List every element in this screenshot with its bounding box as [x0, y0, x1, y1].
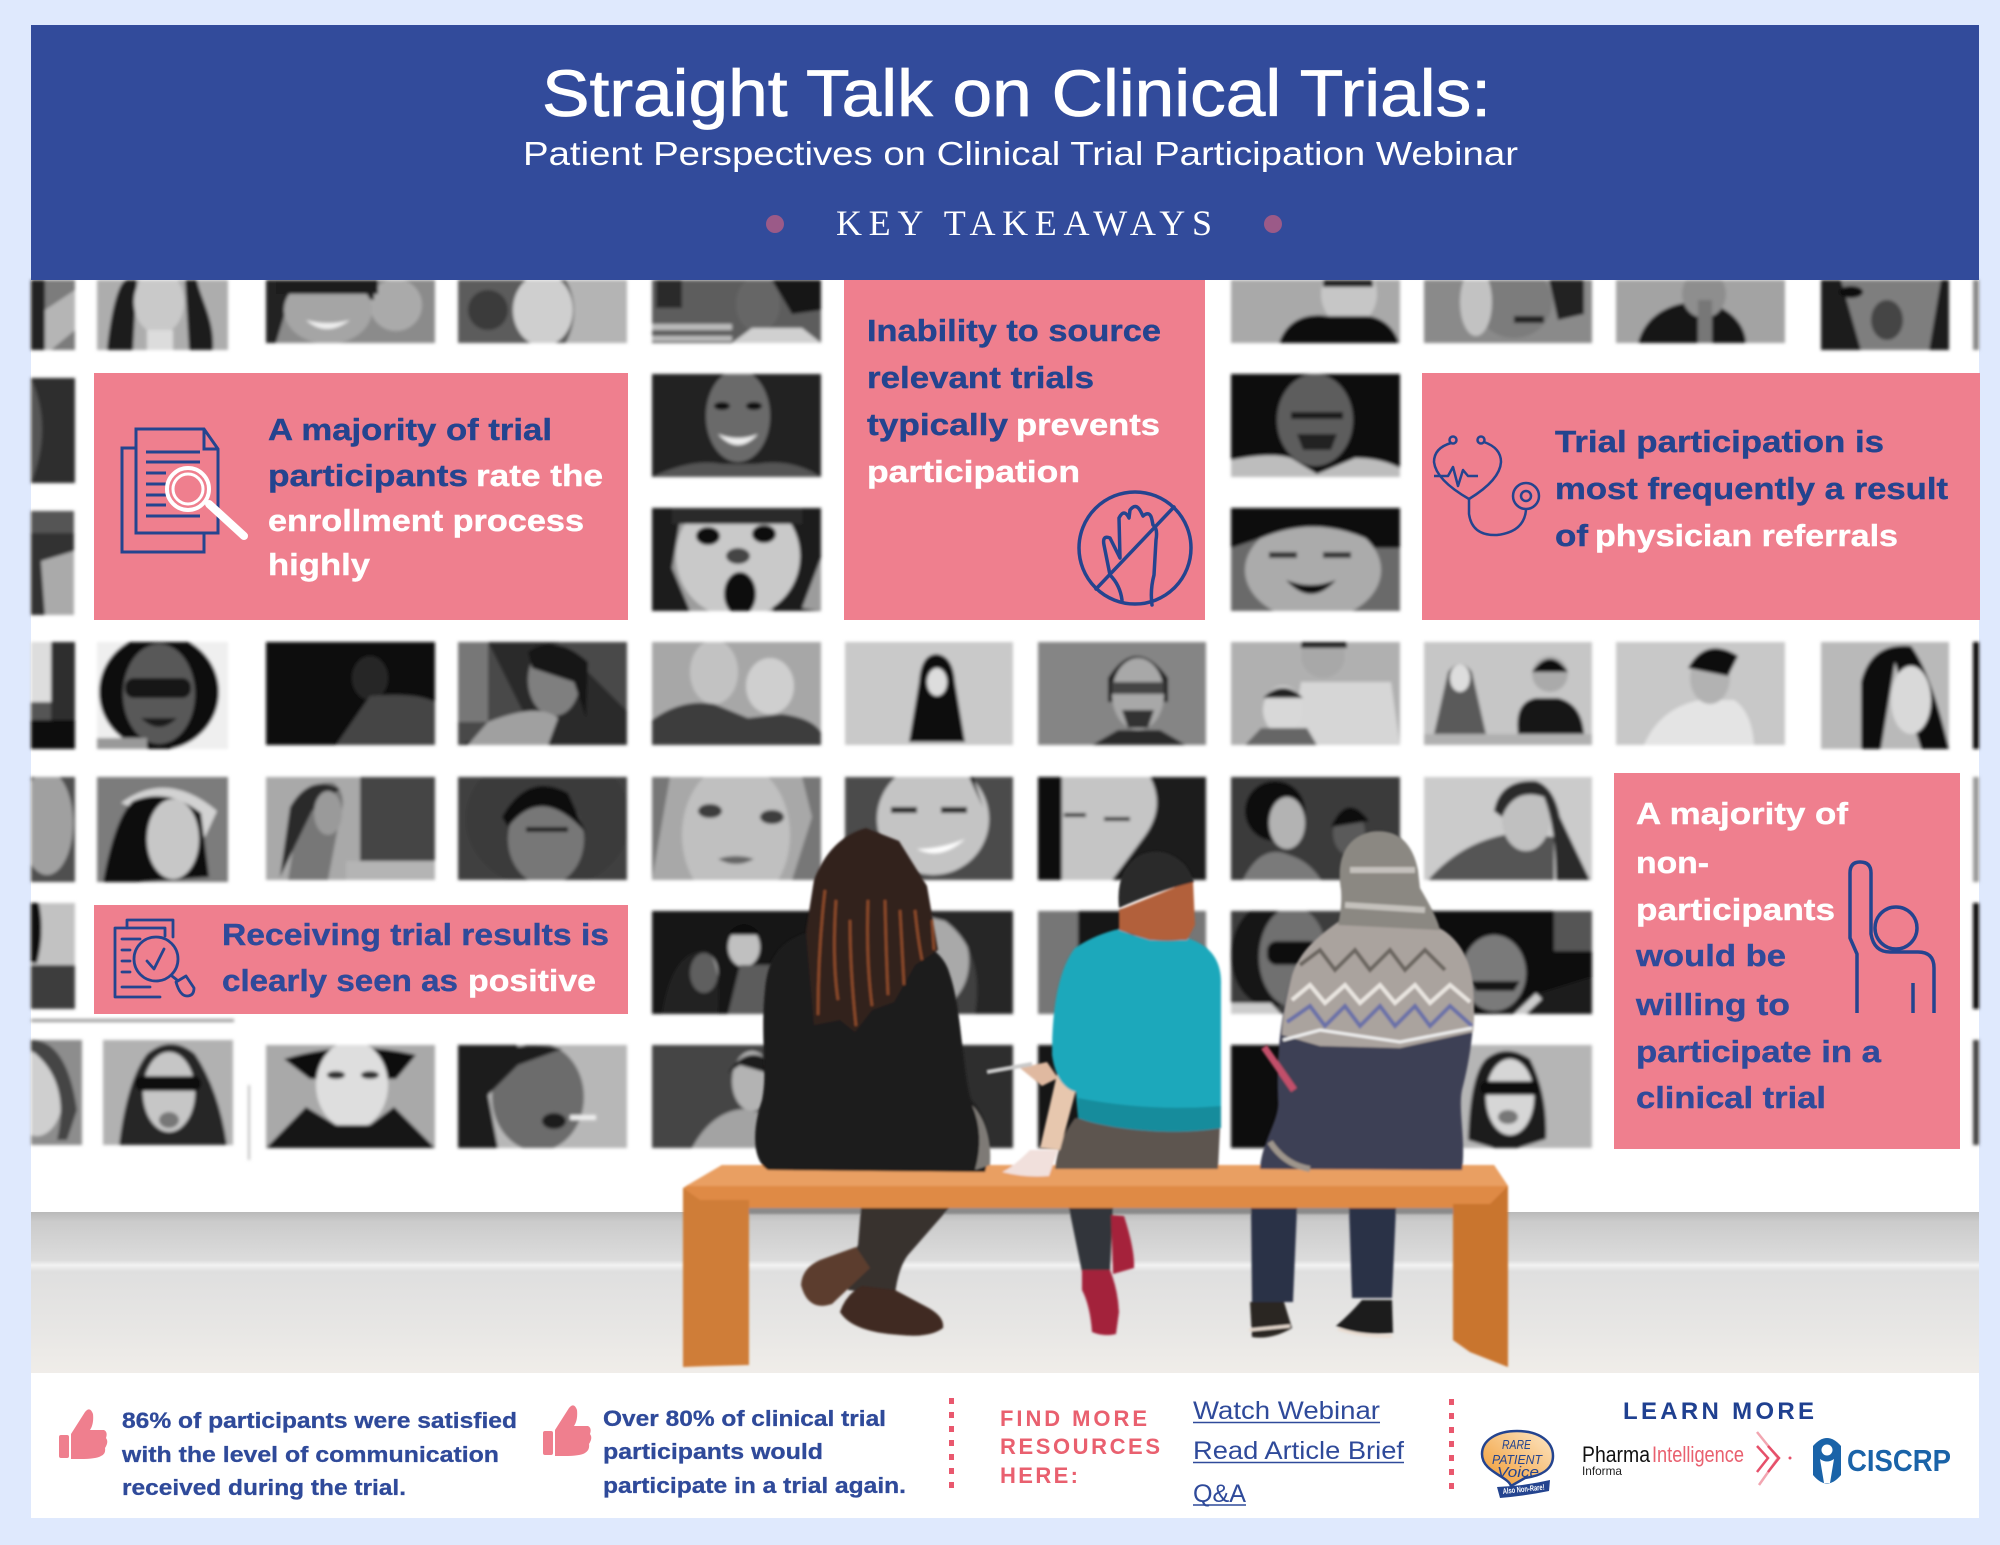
photo: obscured portrait — [1036, 908, 1208, 1016]
text: enrollment rated highly: participants — [268, 458, 468, 493]
text: trial results positive: Receiving trial results is — [222, 917, 609, 952]
photo: woman standing on light background — [844, 640, 1014, 746]
photo: man smoking — [458, 1043, 627, 1151]
people on bench — [683, 828, 1508, 1367]
header banner — [31, 25, 1979, 280]
photo: row 1 smiling man — [263, 280, 438, 346]
photo: dark portrait hidden by teal sweater — [1038, 1045, 1206, 1148]
photo: row 7 edge blonde — [11, 1040, 82, 1145]
icon: thumbs up — [59, 1409, 107, 1459]
logo: Pharma Intelligence: Intelligence — [1652, 1442, 1744, 1467]
bench shadow strip — [749, 1206, 1453, 1214]
photo: man with sunglasses — [1228, 908, 1342, 1016]
photo: laughing man — [1228, 505, 1403, 614]
find more resources heading: FIND MORE — [1000, 1406, 1147, 1431]
photo: row 1 edge hand — [28, 278, 78, 353]
photo: two women — [1228, 774, 1403, 883]
icon: document with magnifier — [122, 429, 244, 552]
photo: woman in black hat — [266, 1041, 435, 1148]
footer — [31, 1373, 1979, 1518]
text: willing to participate — [1635, 796, 1882, 1115]
text: enrollment rated highly: enrollment process — [268, 503, 584, 538]
text: willing to participate: A majority of — [1636, 796, 1849, 831]
text: inability to source trials: typically — [867, 407, 1009, 442]
logo: Pharma Intelligence — [1582, 1432, 1792, 1485]
photo: man in hat with moustache — [1424, 911, 1592, 1014]
icon: raised hand — [1850, 862, 1934, 1013]
find more resources heading: RESOURCES — [1000, 1434, 1160, 1459]
text: physician referrals: of — [1555, 518, 1589, 553]
stat: communication satisfaction — [121, 1408, 517, 1500]
text: enrollment rated highly: rate the — [476, 458, 603, 493]
find more resources heading — [1000, 1406, 1160, 1488]
photo: elderly woman — [930, 908, 1016, 1017]
stat: communication satisfaction: received during the trial. — [122, 1475, 406, 1500]
resource links: Read Article Brief — [1193, 1437, 1404, 1465]
learn more heading: LEARN MORE — [1623, 1398, 1814, 1425]
photo: couple with glasses — [649, 908, 811, 1017]
left dot — [766, 215, 784, 233]
text: inability to source trials: prevents — [1016, 407, 1160, 442]
logo: Rare Patient Voice: Voice — [1497, 1464, 1539, 1481]
stat: would participate again: participate in a trial again. — [603, 1473, 906, 1498]
photo: elderly couple — [649, 640, 824, 748]
text: physician referrals: Trial participation is — [1555, 424, 1884, 459]
text: willing to participate: participate in a — [1636, 1034, 1882, 1069]
panel: willing to participate — [1614, 773, 1960, 1149]
text: enrollment rated highly: A majority of trial — [268, 412, 552, 447]
text: inability to source trials: participation — [867, 454, 1080, 489]
text: physician referrals — [1555, 424, 1948, 553]
photo: smiling woman — [649, 371, 824, 480]
person: middle woman legs and red boots — [1069, 1208, 1134, 1335]
photo: woman in shadow — [263, 639, 438, 748]
person: right woman in patterned sweater — [1260, 831, 1474, 1170]
photo: two people at table — [1422, 640, 1594, 747]
panel: enrollment — [94, 373, 628, 620]
resource links: Watch Webinar — [1193, 1397, 1380, 1425]
text: physician referrals: most frequently a result — [1555, 471, 1948, 506]
icon: stethoscope — [1434, 436, 1539, 535]
photo: elderly man — [1228, 371, 1403, 479]
photo: woman with ponytail — [264, 774, 438, 882]
photo: woman in sunglasses with tongue out — [103, 1040, 233, 1145]
icon: document with check magnifier — [115, 920, 194, 997]
text: inability to source trials: Inability to source — [867, 313, 1161, 348]
person: left woman legs and boots — [801, 1208, 949, 1336]
photo: man with glasses — [1036, 640, 1208, 748]
text: willing to participate: non- — [1636, 845, 1709, 880]
text: willing to participate: participants — [1636, 892, 1835, 927]
text: willing to participate: would be — [1635, 938, 1786, 973]
panel: inability to source trials — [844, 280, 1205, 620]
key takeaways label: KEY TAKEAWAYS — [836, 203, 1212, 243]
text: inability to source trials: relevant trials — [867, 360, 1094, 395]
icon: hand with prohibition sign — [1079, 492, 1191, 605]
thin wall rule vertical — [248, 1085, 250, 1160]
text: inability to source trials — [867, 313, 1161, 489]
gallery floor — [31, 1212, 1979, 1373]
stat: communication satisfaction: 86% of participants were satisfied — [122, 1408, 517, 1433]
text: willing to participate: clinical trial — [1636, 1080, 1826, 1115]
stat: would participate again: participants would — [603, 1439, 823, 1464]
person: left woman in black sweater with dreadlocks — [755, 828, 990, 1172]
photo: right edge sliver top — [1973, 280, 1979, 350]
photo: row 5 edge old man — [28, 774, 78, 884]
photo: right edge sliver row 5 — [1973, 777, 1979, 882]
photo: blonde close-up — [650, 774, 824, 882]
stat: would participate again: Over 80% of clinical trial — [603, 1406, 886, 1431]
photo: row 1 old man — [1614, 280, 1787, 346]
logo: Rare Patient Voice: Also Non-Rare! — [1502, 1483, 1545, 1496]
logo: Rare Patient Voice: PATIENT — [1492, 1452, 1543, 1467]
logo: Pharma Intelligence: Pharma — [1582, 1442, 1651, 1467]
logo: Pharma Intelligence: Informa — [1582, 1464, 1622, 1478]
photo: curly-haired man — [95, 639, 228, 752]
text: trial results positive — [222, 917, 609, 998]
text: enrollment rated highly — [268, 412, 603, 582]
text: willing to participate: willing to — [1635, 987, 1790, 1022]
person: right woman legs and sneakers — [1249, 1208, 1396, 1338]
resource links — [1193, 1397, 1404, 1508]
photo: smiling woman outdoors — [652, 1045, 821, 1148]
stat: would participate again — [603, 1406, 906, 1498]
panel: trial results — [94, 905, 628, 1014]
title: Straight Talk on Clinical Trials: — [542, 56, 1491, 130]
logo: Rare Patient Voice — [1482, 1431, 1553, 1498]
photo: row 6 edge landscape — [28, 900, 78, 1012]
photo: woman with sunglasses on head — [1422, 776, 1594, 883]
photo: laughing woman with patterned background — [1819, 640, 1952, 752]
photo: row 1 man in black tee — [1229, 280, 1402, 346]
text: trial results positive: clearly seen as — [222, 963, 458, 998]
text: trial results positive: positive — [468, 963, 596, 998]
photo: row 1 woman at window — [650, 280, 824, 346]
photo: left edge row 2 — [28, 375, 78, 486]
photo: man with sunglasses and tongue out — [1424, 1045, 1592, 1148]
photo: black portrait — [1231, 1045, 1400, 1148]
photo: row 1 woman dark hair — [95, 280, 230, 353]
photo: woman with beret — [94, 774, 230, 885]
person: middle woman seated in teal top — [987, 852, 1221, 1176]
photo: left edge row 3 — [28, 508, 77, 618]
photo: row 1 man with hand — [1422, 280, 1594, 346]
panel: physician referrals — [1422, 373, 1980, 620]
photo: man on phone — [1614, 640, 1786, 746]
gallery wall background — [31, 280, 1979, 1212]
right dot — [1264, 215, 1282, 233]
logo: CISCRP: CISCRP — [1847, 1443, 1951, 1478]
photo: row 1 close-up face — [1818, 280, 1952, 353]
photo: young man smiling — [842, 774, 1016, 882]
find more resources heading: HERE: — [1000, 1463, 1078, 1488]
photo: screaming child — [649, 505, 824, 614]
photo: man with baby — [1229, 639, 1402, 748]
photo: right edge sliver row 4 — [1973, 642, 1979, 749]
photo: row 1 blonde woman — [456, 280, 629, 346]
photo: dark portrait — [845, 1045, 1013, 1148]
photo wall of portraits — [11, 262, 1979, 1160]
subtitle: Patient Perspectives on Clinical Trial Participation Webinar — [523, 135, 1518, 172]
photo: woman looking down — [1035, 774, 1209, 883]
bench — [683, 1165, 1508, 1367]
photo: right edge sliver row 7 — [1973, 1040, 1979, 1145]
dotted separator — [949, 1398, 954, 1494]
text: physician referrals: physician referrals — [1595, 518, 1898, 553]
photo: woman in polka dots — [456, 639, 630, 748]
icon: thumbs up — [543, 1405, 591, 1456]
text: enrollment rated highly: highly — [268, 547, 371, 582]
thin wall rule — [31, 1019, 234, 1022]
logo: CISCRP — [1813, 1438, 1951, 1484]
resource links: Q&A — [1193, 1480, 1246, 1508]
dotted separator — [1449, 1399, 1454, 1495]
logo: Rare Patient Voice: RARE — [1502, 1437, 1531, 1452]
photo: row 4 edge — [28, 639, 78, 752]
photo: woman with fur hood — [456, 774, 630, 883]
photo: right edge sliver row 6 — [1973, 903, 1979, 1009]
stat: communication satisfaction: with the level of communication — [121, 1442, 499, 1467]
